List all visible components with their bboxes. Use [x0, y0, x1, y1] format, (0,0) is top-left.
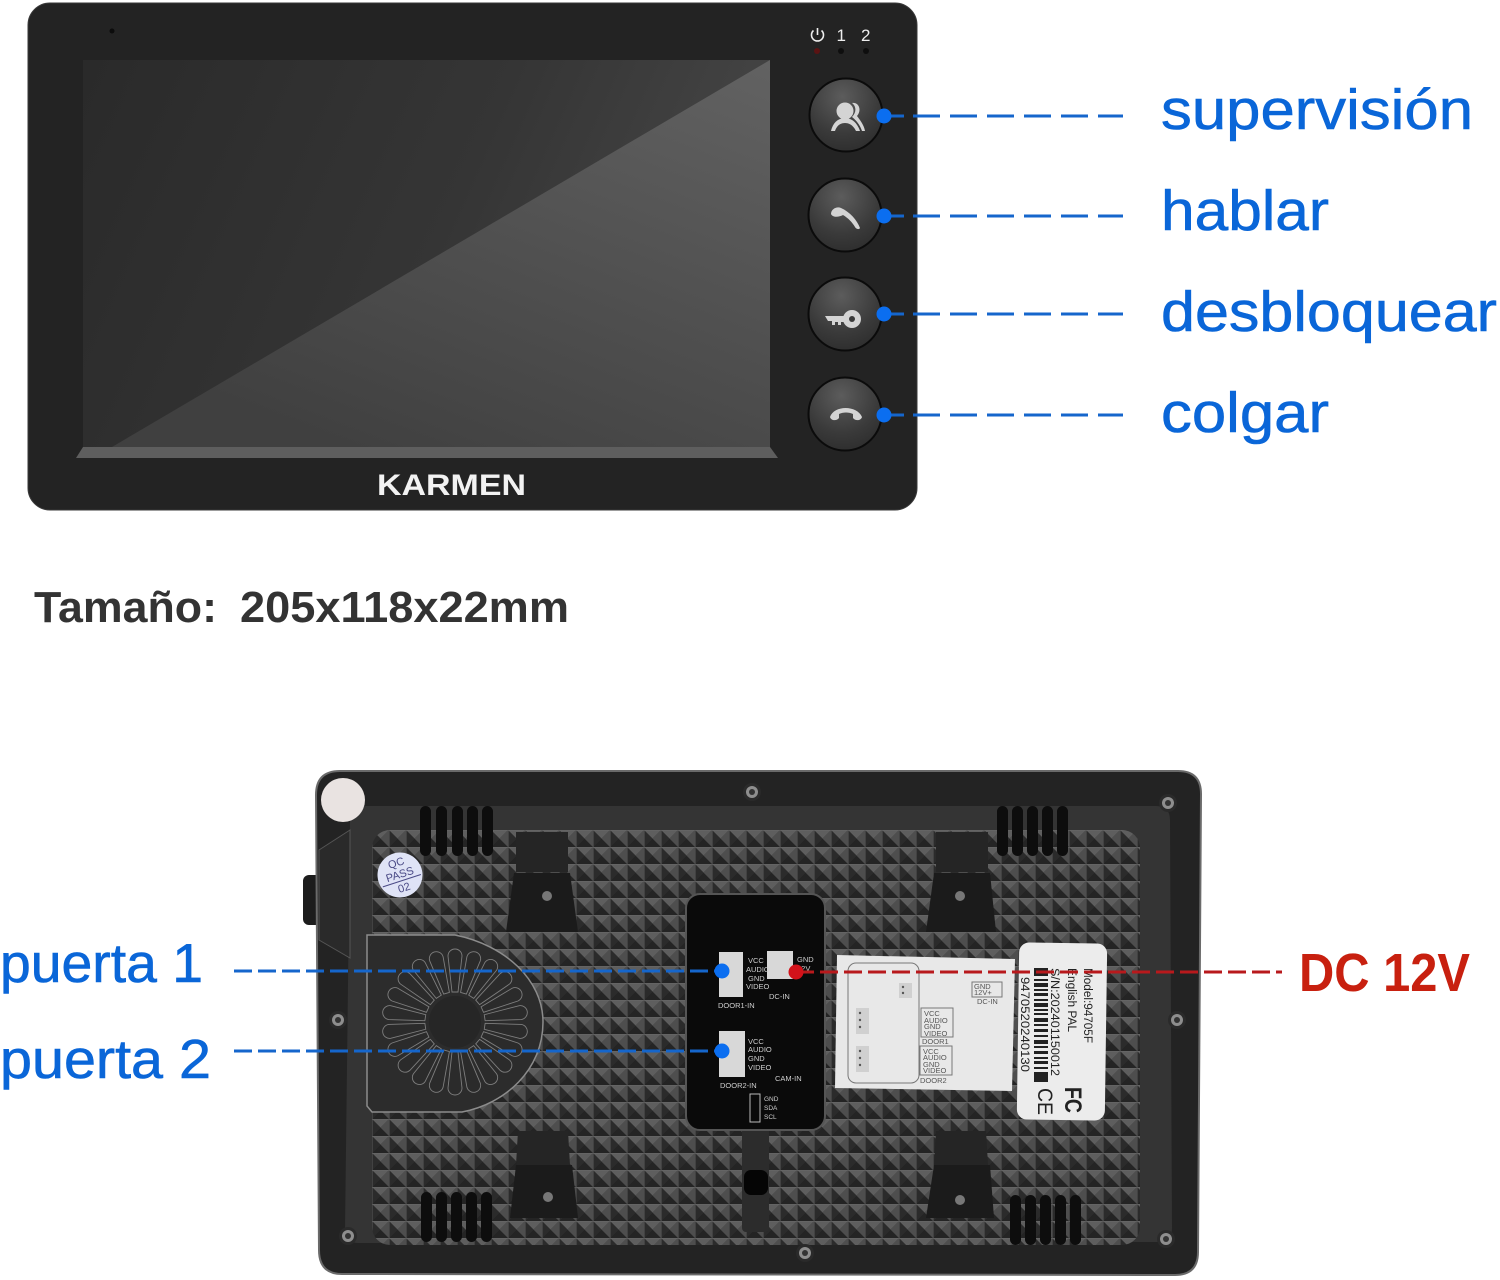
speaker vents: bottom right — [1010, 1195, 1081, 1245]
bus pins — [750, 1094, 779, 1122]
indicator numbers: 1 — [836, 26, 846, 45]
model text: Model:94705F — [1081, 968, 1093, 1043]
leader line — [234, 964, 730, 978]
leader line — [876, 208, 1123, 224]
wiring diagram sticker: VIDEO — [924, 1029, 948, 1038]
rear housing — [316, 771, 1201, 1275]
mounting foot: bottom left — [510, 1131, 578, 1218]
door 2 name: DOOR2-IN — [720, 1081, 757, 1090]
wiring diagram sticker: DOOR2 — [920, 1076, 947, 1085]
callout: colgar — [876, 381, 1329, 445]
mounting foot: top left — [506, 832, 578, 932]
wiring diagram sticker: 12V+ — [974, 988, 992, 997]
power icon — [812, 28, 823, 41]
label: hablar — [1161, 179, 1329, 243]
wiring diagram sticker — [835, 955, 1015, 1091]
wiring diagram sticker: GND — [923, 1060, 940, 1069]
barcode number: 9470520240130 — [1018, 977, 1030, 1072]
screws — [329, 783, 1186, 1262]
leader line — [876, 408, 1123, 422]
indicator numbers — [836, 26, 870, 45]
mounting foot: top right — [926, 832, 996, 932]
leader line — [876, 306, 1123, 322]
callout: puerta 2 — [0, 1028, 730, 1090]
connector: DC — [767, 951, 793, 979]
speaker grille — [367, 935, 543, 1112]
model label — [1017, 942, 1107, 1121]
QC pass sticker: PASS — [385, 865, 415, 885]
language text: English PAL — [1065, 968, 1077, 1033]
callout: desbloquear — [876, 280, 1497, 344]
speaker vents: top right — [997, 806, 1068, 856]
textured back — [372, 830, 1140, 1245]
inner frame — [345, 806, 1172, 1243]
wiring diagram sticker: VCC — [923, 1047, 939, 1056]
camera dot — [110, 28, 114, 34]
connector panel — [686, 894, 825, 1130]
DC pin labels: 12V — [797, 964, 810, 973]
door 1 pin labels: VCC — [748, 956, 764, 965]
wiring diagram sticker: AUDIO — [923, 1053, 947, 1062]
wiring diagram sticker: DC-IN — [977, 997, 998, 1006]
bus pins: GND — [764, 1096, 779, 1103]
wiring diagram sticker: VIDEO — [923, 1066, 947, 1075]
wiring diagram sticker: AUDIO — [924, 1016, 948, 1025]
front monitor — [28, 3, 917, 510]
label: colgar — [1161, 381, 1329, 445]
serial text: S/N:202401150012 — [1048, 968, 1060, 1076]
round white sticker — [321, 778, 365, 822]
door 1 pin labels — [746, 956, 770, 991]
brand name: KARMEN — [377, 469, 526, 502]
screen — [83, 60, 770, 447]
left side tab — [319, 830, 350, 958]
callout: hablar — [876, 179, 1329, 243]
callout: DC 12V — [788, 943, 1470, 1003]
bus pins: SDA — [764, 1105, 778, 1112]
label: supervisión — [1161, 78, 1473, 142]
CE mark: CE — [1033, 1088, 1056, 1115]
connector: door 1 — [719, 952, 743, 997]
button: hang up — [808, 378, 882, 450]
door 2 pin labels — [748, 1037, 772, 1072]
speaker vents: top left — [420, 806, 493, 856]
wiring diagram sticker: GND — [924, 1022, 941, 1031]
QC pass sticker — [375, 852, 425, 900]
button: talk — [808, 178, 882, 252]
connector: door 2 — [719, 1031, 745, 1077]
door 2 pin labels: VCC — [748, 1037, 764, 1046]
label: puerta 1 — [0, 932, 203, 994]
DC pin labels — [797, 955, 814, 973]
label: puerta 2 — [0, 1028, 211, 1090]
leader line — [234, 1044, 730, 1058]
button: supervision — [810, 78, 882, 152]
screen lower lip — [76, 447, 778, 458]
door 2 pin labels: AUDIO — [748, 1045, 772, 1054]
hanging slot — [742, 1125, 769, 1232]
callout: puerta 1 — [0, 932, 730, 994]
size text — [34, 583, 569, 632]
door 1 pin labels: AUDIO — [746, 965, 770, 974]
rear monitor — [303, 771, 1201, 1275]
door 2 pin labels: VIDEO — [748, 1063, 772, 1072]
size label: Tamaño: — [34, 583, 217, 632]
QC pass sticker: 02 — [397, 881, 412, 896]
indicator LEDs — [814, 48, 869, 54]
door 1 name: DOOR1-IN — [718, 1001, 755, 1010]
size value: 205x118x22mm — [240, 583, 569, 632]
label: desbloquear — [1161, 280, 1497, 344]
speaker vents: bottom left — [421, 1192, 492, 1242]
FC mark: FC — [1059, 1087, 1086, 1113]
bezel — [28, 3, 917, 510]
leader line — [876, 108, 1123, 124]
wiring diagram sticker: GND — [974, 982, 991, 991]
bus pins: SCL — [764, 1114, 777, 1121]
door 1 pin labels: VIDEO — [746, 982, 770, 991]
status indicators — [812, 26, 870, 54]
button: unlock — [808, 278, 882, 350]
callout: supervisión — [876, 78, 1473, 142]
camera input name: CAM-IN — [775, 1074, 802, 1083]
door 1 pin labels: GND — [748, 974, 765, 983]
door 2 pin labels: GND — [748, 1054, 765, 1063]
barcode — [1034, 968, 1048, 1082]
wiring diagram sticker: VCC — [924, 1009, 940, 1018]
leader line — [788, 964, 1282, 980]
indicator numbers: 2 — [861, 26, 870, 45]
side knob — [303, 875, 323, 925]
mounting foot: bottom right — [926, 1131, 994, 1218]
label: DC 12V — [1299, 943, 1470, 1003]
QC pass sticker: QC — [387, 855, 406, 872]
wiring diagram sticker: DOOR1 — [922, 1037, 949, 1046]
DC name: DC-IN — [769, 992, 790, 1001]
DC pin labels: GND — [797, 955, 814, 964]
